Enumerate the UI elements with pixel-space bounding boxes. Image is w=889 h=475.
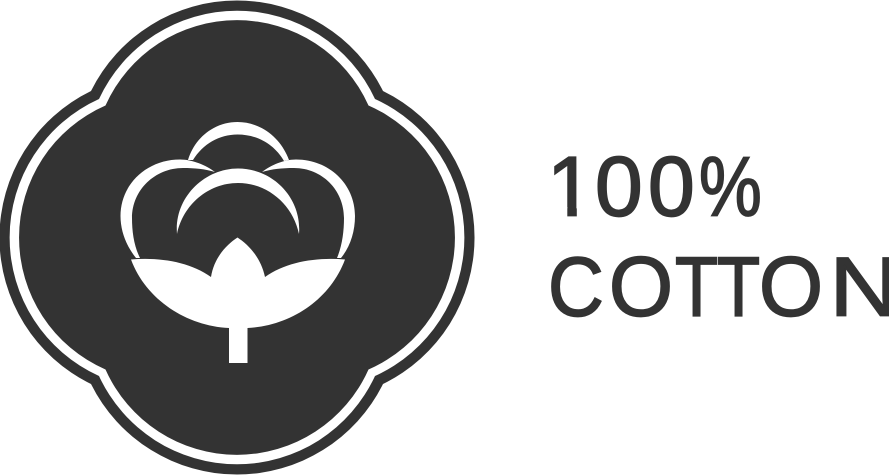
icon: cotton flower	[120, 122, 355, 363]
heading: 100%: 0	[648, 140, 695, 234]
heading: 100%: %	[699, 141, 762, 234]
badge outer shape	[0, 0, 475, 475]
cotton boll top arc	[188, 122, 289, 161]
cotton boll left arc	[120, 160, 215, 258]
heading: 100%	[547, 139, 762, 234]
heading: COTTON: O	[759, 240, 823, 334]
heading: COTTON: C	[548, 241, 604, 334]
heading: COTTON	[548, 240, 889, 334]
cotton boll middle crescent	[177, 168, 299, 234]
heading: COTTON: T	[675, 241, 718, 334]
flower leaves and stem	[131, 238, 345, 363]
heading: 100%: 1	[547, 140, 594, 234]
cotton boll right arc	[262, 160, 355, 258]
heading: COTTON: T	[717, 241, 760, 334]
heading: 100%: 0	[595, 139, 643, 233]
badge: quatrefoil emblem	[0, 0, 475, 475]
badge white ring	[10, 11, 464, 464]
heading: COTTON: O	[609, 240, 673, 334]
